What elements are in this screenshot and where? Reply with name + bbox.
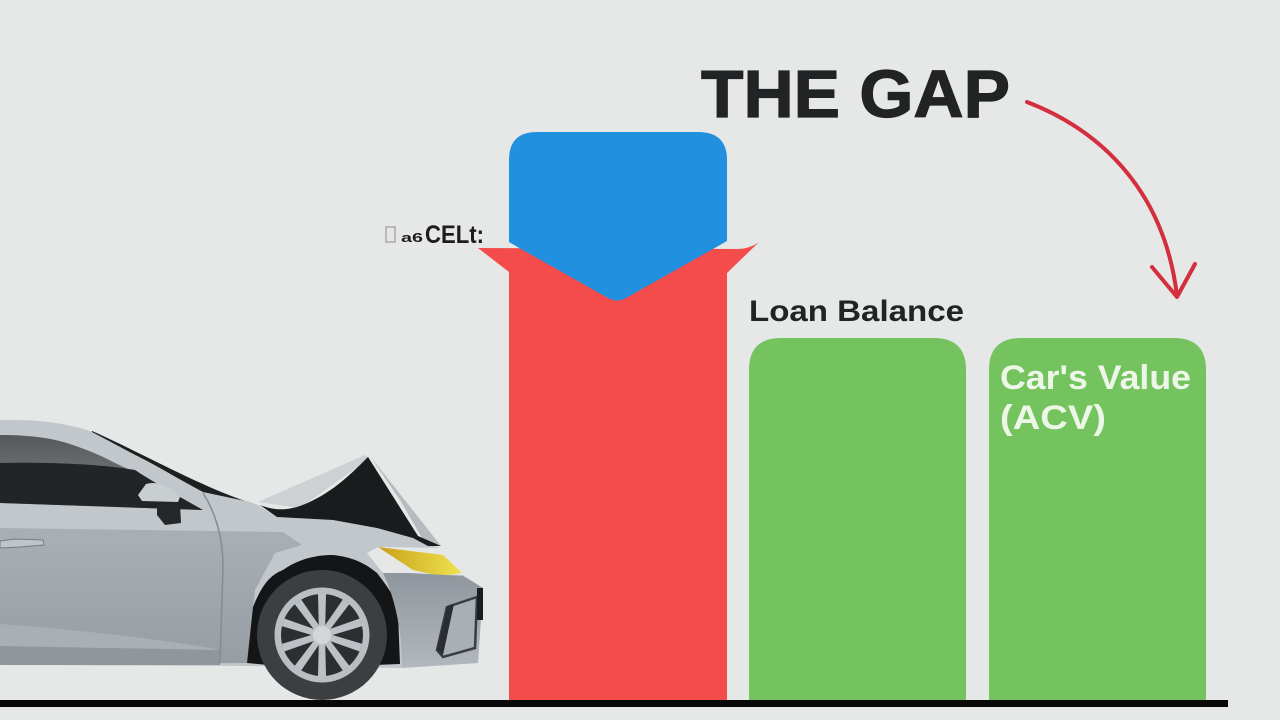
car door handle <box>0 539 44 548</box>
car windshield <box>90 431 248 504</box>
crumpled hood <box>258 455 441 546</box>
bar: red <box>478 242 759 700</box>
headlight <box>378 547 462 576</box>
label: car's value: (ACV) <box>1000 399 1106 437</box>
label: garbled: a6 <box>401 230 423 245</box>
bar: car's value <box>989 338 1206 700</box>
bar: loan balance <box>749 338 966 700</box>
car dark window <box>0 463 203 510</box>
label: loan balance: Loan Balance <box>749 295 964 328</box>
car body <box>0 420 483 668</box>
title: THE GAP <box>701 57 1010 132</box>
car sill <box>0 624 220 665</box>
illustration: crashed car <box>0 420 483 700</box>
label: garbled: CELt: <box>425 221 484 249</box>
bar: blue <box>509 132 727 300</box>
car side window <box>0 435 203 510</box>
arrow <box>1027 102 1195 297</box>
label: car's value: Car's Value <box>1000 359 1191 397</box>
label: garbled <box>386 221 484 249</box>
front bumper <box>383 573 483 668</box>
car lower door panel <box>0 528 302 665</box>
front wheel <box>257 570 387 700</box>
car door seam <box>203 493 223 663</box>
front wheel arch <box>247 555 400 668</box>
baseline <box>0 700 1228 707</box>
car mirror <box>138 483 181 525</box>
